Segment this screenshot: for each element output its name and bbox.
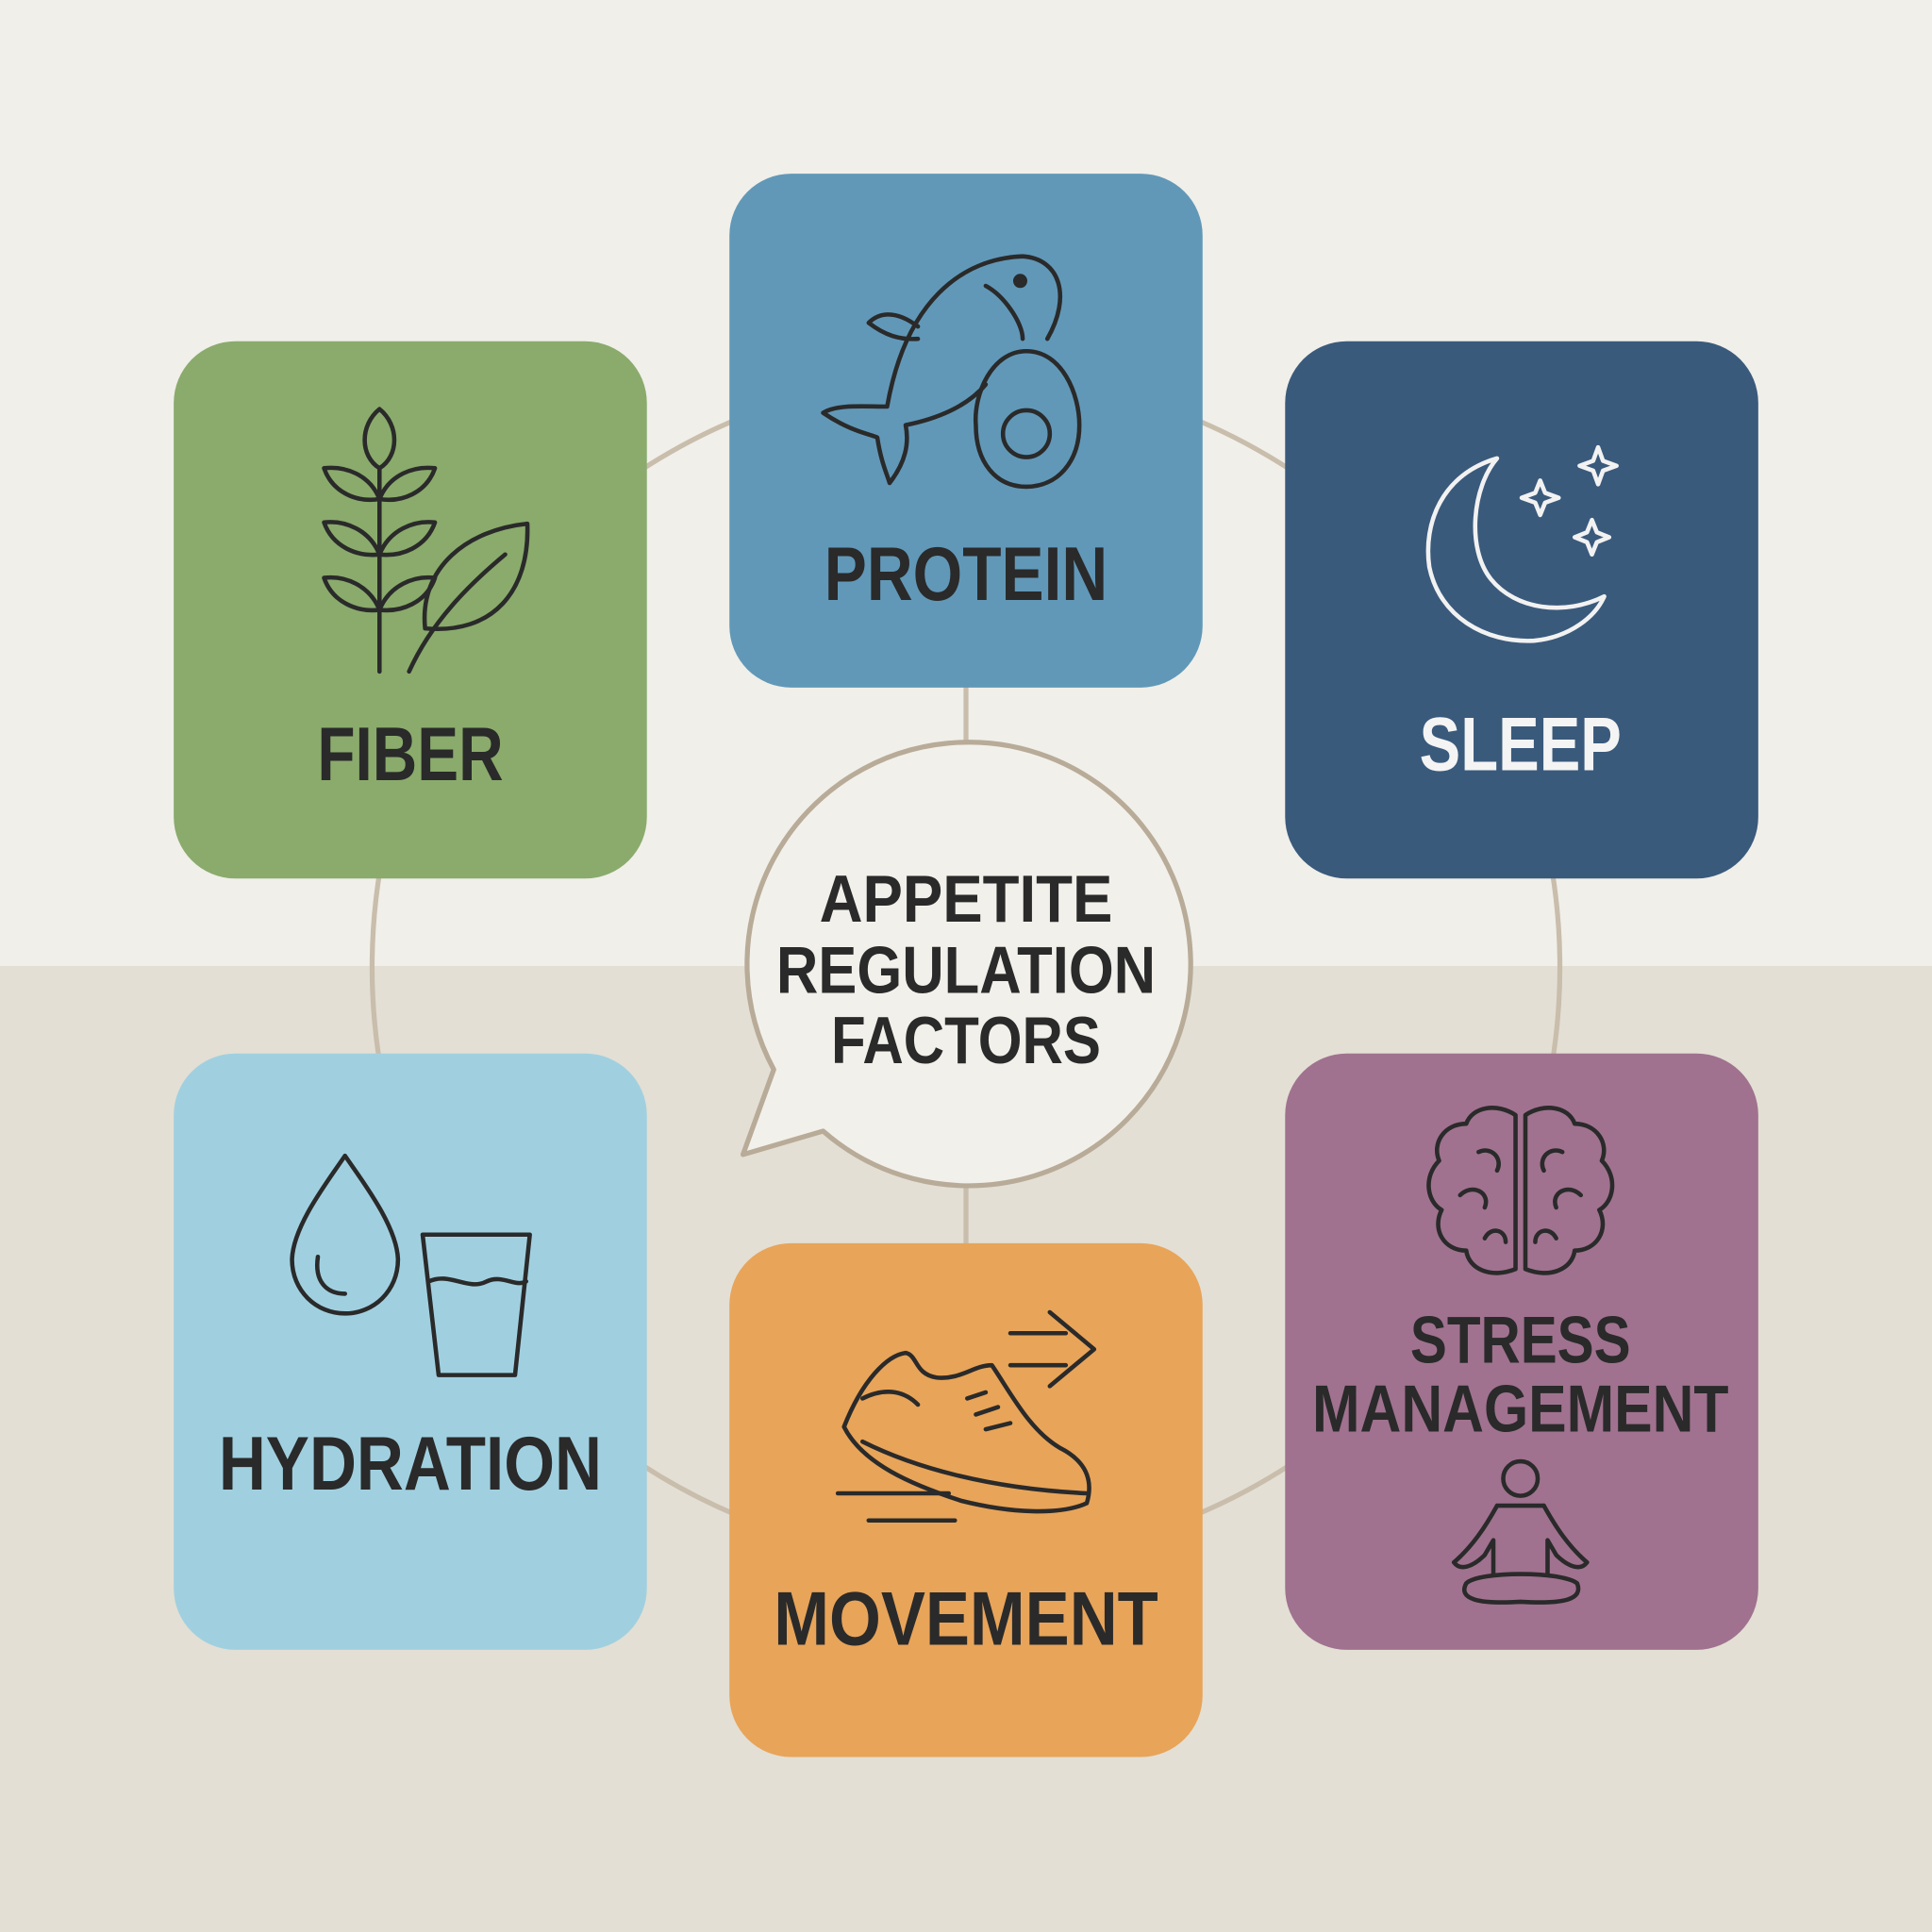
panel: stress management	[1285, 1054, 1758, 1650]
panel: movement	[729, 1243, 1203, 1757]
panel: sleep	[1285, 341, 1758, 878]
panel: sleep: SLEEP	[1420, 702, 1622, 787]
icon: brain	[1428, 1108, 1612, 1273]
icon: wheat and leaf	[325, 409, 527, 672]
panel: hydration	[174, 1054, 647, 1650]
panel: fiber	[174, 341, 647, 878]
icon: moon and stars	[1428, 447, 1617, 641]
panel: protein	[729, 174, 1203, 688]
icon: running shoe with arrow	[838, 1312, 1094, 1521]
center bubble: appetite regulation factors: APPETITE	[820, 861, 1112, 936]
center bubble: appetite regulation factors	[743, 742, 1191, 1186]
center bubble: appetite regulation factors: FACTORS	[831, 1003, 1101, 1077]
panel: fiber: FIBER	[317, 712, 504, 797]
panel: hydration: HYDRATION	[219, 1422, 602, 1507]
panel: protein: PROTEIN	[824, 532, 1108, 617]
panel: movement: MOVEMENT	[774, 1577, 1158, 1662]
center bubble: appetite regulation factors: REGULATION	[776, 933, 1156, 1008]
icon: meditation figure	[1454, 1461, 1587, 1603]
icon: fish and avocado	[823, 257, 1079, 487]
panel: stress management: STRESS	[1410, 1303, 1631, 1377]
icon: water drop and glass	[292, 1156, 530, 1375]
panel: stress management: MANAGEMENT	[1312, 1372, 1728, 1446]
